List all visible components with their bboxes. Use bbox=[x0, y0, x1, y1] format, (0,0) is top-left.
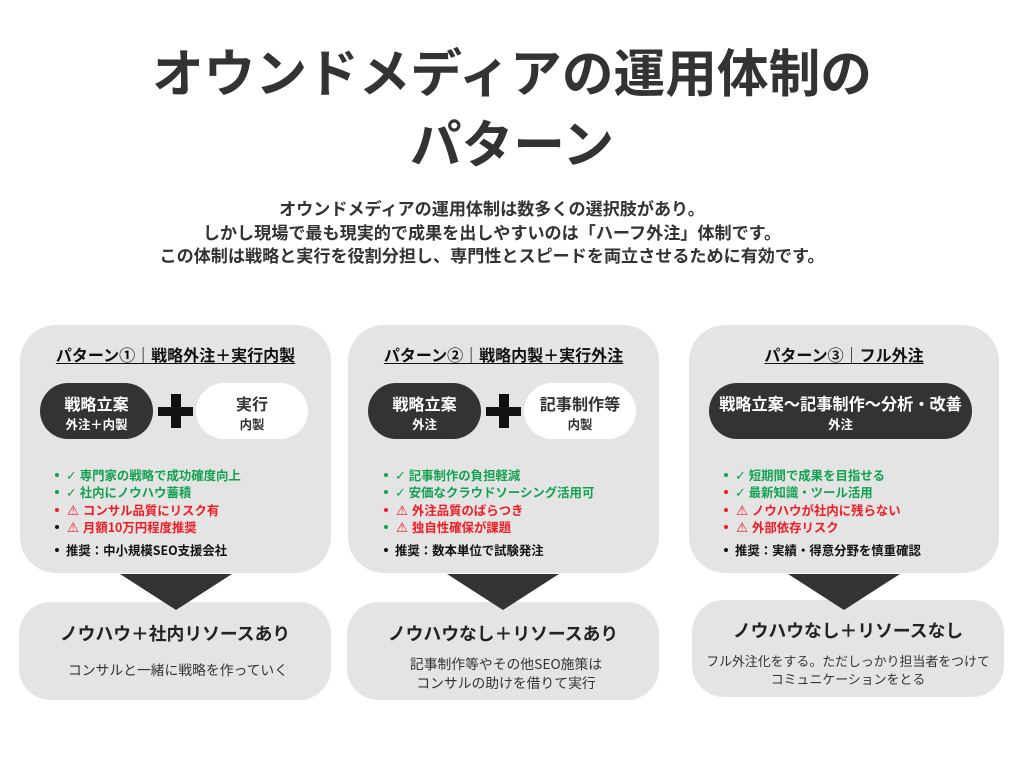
intro text: しかし現場で最も現実的で成果を出しやすいのは「ハーフ外注」体制です。 bbox=[203, 218, 781, 244]
title bbox=[152, 32, 872, 178]
bullet: merit: ✓ 専門家の戦略で成功確度向上 bbox=[66, 466, 241, 484]
bullet: risk: ⚠ 外注品質のばらつき bbox=[396, 501, 523, 519]
pill: content production: 記事制作等 bbox=[540, 391, 620, 415]
pill: full outsourcing bbox=[709, 383, 972, 439]
result text 2: コンサルの助けを借りて実行 bbox=[416, 672, 596, 692]
result box: pattern 3 bbox=[692, 600, 1004, 697]
intro text: この体制は戦略と実行を役割分担し、専門性とスピードを両立させるために有効です。 bbox=[160, 242, 824, 267]
bullet: risk: ⚠ ノウハウが社内に残らない bbox=[736, 501, 901, 519]
bullet: risk: ⚠ 外部依存リスク bbox=[736, 518, 839, 536]
pill: strategy bbox=[40, 383, 153, 439]
bullet: merit: ✓ 安価なクラウドソーシング活用可 bbox=[395, 482, 594, 500]
pill: content production bbox=[524, 383, 636, 439]
bullet list bbox=[55, 466, 241, 558]
pill: full outsourcing: 外注 bbox=[828, 415, 853, 433]
pill: execution bbox=[196, 383, 308, 439]
bullet: risk: ⚠ 独自性確保が課題 bbox=[396, 518, 511, 536]
panel: pattern 1 bbox=[20, 325, 331, 573]
bullet: merit: ✓ 記事制作の負担軽減 bbox=[395, 466, 520, 484]
arrow: pattern 3 bbox=[788, 574, 900, 610]
result heading 2: ノウハウなし＋リソースあり bbox=[388, 620, 618, 646]
pill: strategy bbox=[368, 383, 481, 439]
pill: content production: 内製 bbox=[568, 415, 592, 433]
panel: pattern 2 bbox=[348, 325, 659, 573]
intro text: オウンドメディアの運用体制は数多くの選択肢があり。 bbox=[279, 195, 705, 220]
panel heading 3: パターン③｜フル外注 bbox=[764, 342, 924, 366]
result text 3: フル外注化をする。ただしっかり担当者をつけて bbox=[706, 651, 990, 670]
panel heading 1: パターン①｜戦略外注＋実行内製 bbox=[56, 342, 295, 366]
bullet: risk: ⚠ コンサル品質にリスク有 bbox=[67, 501, 219, 519]
result text 2 bbox=[410, 652, 602, 692]
result heading 3: ノウハウなし＋リソースなし bbox=[733, 617, 963, 643]
panel: pattern 3 bbox=[689, 325, 999, 573]
result heading 1: ノウハウ＋社内リソースあり bbox=[60, 620, 290, 646]
pill: execution: 実行 bbox=[236, 391, 268, 415]
bullet: merit: ✓ 短期間で成果を目指せる bbox=[735, 466, 885, 484]
pill: strategy: 戦略立案 bbox=[392, 391, 457, 415]
bullet list bbox=[724, 466, 921, 558]
title: パターン bbox=[410, 103, 614, 178]
bullet: recommendation: 推奨：数本単位で試験発注 bbox=[395, 540, 544, 558]
intro text bbox=[160, 195, 824, 267]
result box: pattern 2 bbox=[347, 602, 659, 700]
icon: plus bbox=[486, 394, 521, 428]
panel heading 2: パターン②｜戦略内製＋実行外注 bbox=[384, 342, 623, 366]
pill: strategy: 外注 bbox=[412, 415, 437, 433]
pill: strategy: 戦略立案 bbox=[64, 391, 129, 415]
result box: pattern 1 bbox=[19, 602, 331, 700]
bullet: recommendation: 推奨：中小規模SEO支援会社 bbox=[66, 540, 227, 558]
pill: full outsourcing: 戦略立案～記事制作～分析・改善 bbox=[719, 391, 962, 415]
bullet: merit: ✓ 最新知識・ツール活用 bbox=[735, 482, 873, 500]
result text 2: 記事制作等やその他SEO施策は bbox=[410, 652, 602, 672]
arrow: pattern 2 bbox=[447, 574, 559, 610]
bullet: merit: ✓ 社内にノウハウ蓄積 bbox=[66, 482, 191, 500]
pill: strategy: 外注＋内製 bbox=[66, 415, 127, 433]
icon: plus bbox=[158, 394, 193, 428]
arrow: pattern 1 bbox=[120, 574, 232, 610]
pill: execution: 内製 bbox=[240, 415, 264, 433]
bullet: risk: ⚠ 月額10万円程度推奨 bbox=[67, 518, 197, 536]
result text 3 bbox=[706, 651, 990, 688]
title: オウンドメディアの運用体制の bbox=[152, 32, 872, 107]
bullet list bbox=[384, 466, 594, 558]
bullet: recommendation: 推奨：実績・得意分野を慎重確認 bbox=[735, 540, 921, 558]
result text 3: コミュニケーションをとる bbox=[771, 669, 925, 688]
result text 1: コンサルと一緒に戦略を作っていく bbox=[68, 659, 288, 679]
